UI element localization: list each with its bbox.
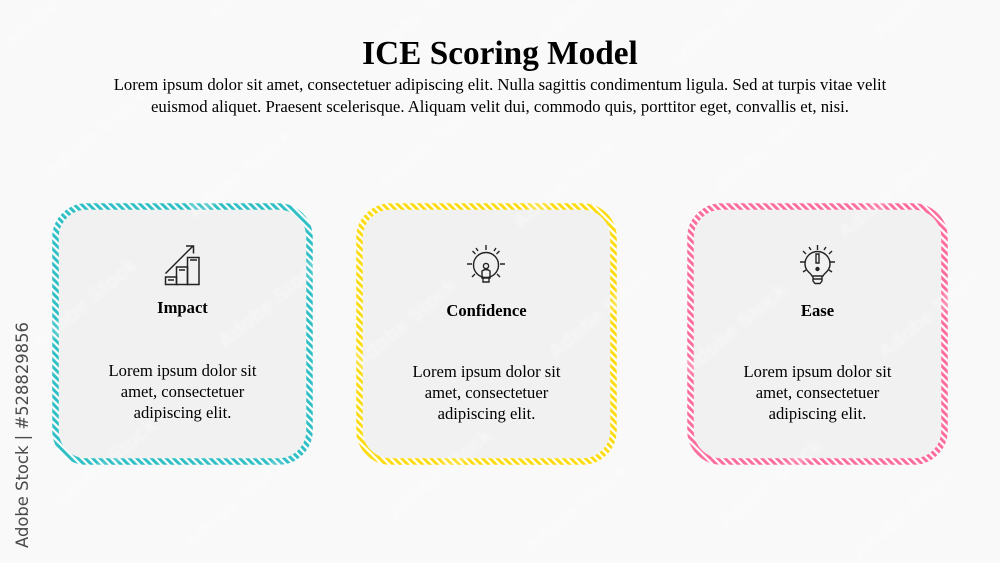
watermark pattern: Adobe Stock <box>38 84 152 184</box>
watermark pattern: Adobe Stock <box>373 94 487 194</box>
panel: ease <box>744 245 892 423</box>
watermark pattern: Adobe Stock <box>543 264 657 364</box>
text: ease: adipiscing elit. <box>769 404 866 423</box>
text: confidence: amet, consectetuer <box>425 383 548 402</box>
stock id label: Adobe Stock | #528829856 <box>13 322 32 548</box>
watermark pattern: Adobe Stock <box>213 254 327 354</box>
text: impact: Lorem ipsum dolor sit <box>109 361 256 380</box>
watermark pattern: Adobe Stock <box>48 414 162 514</box>
heading: ease: Ease <box>801 301 834 320</box>
watermark pattern: Adobe Stock <box>713 434 827 534</box>
watermark pattern: Adobe Stock <box>708 99 822 199</box>
watermark pattern: Adobe Stock <box>833 144 947 244</box>
watermark pattern: Adobe Stock <box>518 459 632 559</box>
text: confidence: adipiscing elit. <box>438 404 535 423</box>
text: ease: amet, consectetuer <box>756 383 879 402</box>
watermark pattern: Adobe Stock <box>848 464 962 563</box>
watermark pattern: Adobe Stock <box>348 274 462 374</box>
intro text: euismod aliquet. Praesent scelerisque. Aliquam velit dui, commodo quis, porttitor eget, convallis et, nisi. <box>151 96 849 116</box>
intro text: Lorem ipsum dolor sit amet, consectetuer adipiscing elit. Nulla sagittis condimentum ligula. Sed at turpis vitae velit <box>114 75 886 94</box>
watermark pattern: Adobe Stock <box>183 124 297 224</box>
heading: impact: Impact <box>157 298 208 317</box>
panel: confidence <box>412 245 560 423</box>
watermark pattern: Adobe Stock <box>28 254 142 354</box>
watermark pattern: Adobe Stock <box>678 279 792 379</box>
heading: confidence: Confidence <box>446 301 527 320</box>
title: ICE Scoring Model <box>362 35 638 72</box>
text: confidence: Lorem ipsum dolor sit <box>413 362 560 381</box>
text: confidence <box>412 362 560 423</box>
watermark pattern: Adobe Stock <box>873 264 987 364</box>
icon: bulb with exclamation <box>800 245 835 284</box>
text: impact <box>108 250 817 422</box>
watermark pattern: Adobe Stock <box>383 424 497 524</box>
text: ease: Lorem ipsum dolor sit <box>744 362 891 381</box>
panel: impact <box>108 245 817 422</box>
intro text <box>114 75 886 116</box>
icon: bulb with person <box>467 245 505 283</box>
text: ease <box>744 362 892 423</box>
watermark pattern: Adobe Stock <box>178 454 292 554</box>
text: impact: amet, consectetuer <box>121 382 244 401</box>
watermark pattern: Adobe Stock <box>508 134 622 234</box>
icon: rising bar chart <box>164 245 200 286</box>
text: impact: adipiscing elit. <box>134 403 231 422</box>
